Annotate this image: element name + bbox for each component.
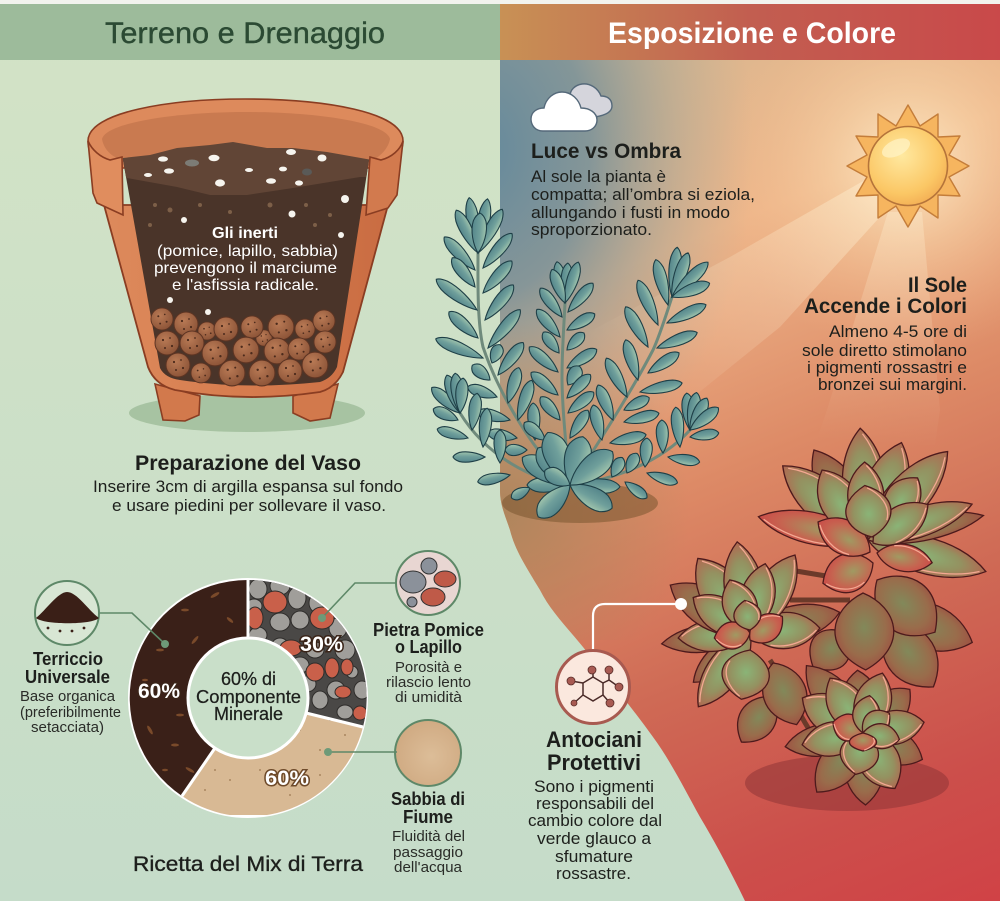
connecting stems — [770, 570, 850, 745]
text block: Preparazione del Vaso — [93, 452, 403, 515]
header: Esposizione e Colore: Esposizione e Colore — [608, 17, 896, 50]
icon: sand — [395, 720, 461, 786]
callout: Sabbia di Fiume: dell'acqua — [394, 859, 463, 876]
top page strip — [0, 0, 1000, 4]
callout: Sabbia di Fiume: passaggio — [393, 844, 463, 861]
text block: Luce vs Ombra: allungando i fusti in modo — [531, 204, 730, 222]
heading: Ricetta del Mix di Terra: Ricetta del Mix di Terra — [133, 853, 363, 876]
rosette: small — [782, 654, 929, 806]
rosette: large — [755, 427, 991, 702]
text block: Il Sole Accende i Colori — [802, 274, 967, 394]
callout: Sabbia di Fiume: Fiume — [403, 807, 453, 827]
callout: Pietra Pomice o Lapillo: Pietra Pomice — [373, 620, 484, 640]
text block: Il Sole Accende i Colori: i pigmenti rossastri e — [807, 359, 967, 377]
pot wall — [104, 205, 388, 397]
donut percentages — [138, 633, 343, 790]
plant shadow — [502, 483, 658, 523]
callout: Pietra Pomice o Lapillo: di umidità — [395, 689, 463, 706]
segment: terriccio 60% — [130, 580, 246, 796]
segment: pietra pomice 30% — [250, 580, 367, 727]
callout: Terriccio Universale: Terriccio — [33, 649, 103, 669]
text block: Preparazione del Vaso: e usare piedini per sollevare il vaso. — [112, 497, 386, 515]
clay pebbles — [151, 308, 336, 386]
text block: Luce vs Ombra: Al sole la pianta è — [531, 168, 666, 186]
text block: Luce vs Ombra: Luce vs Ombra — [531, 140, 681, 163]
panel: right exposure background — [500, 0, 1000, 901]
text block: Il Sole Accende i Colori: bronzei sui margini. — [818, 376, 967, 394]
pot rim front right — [366, 141, 403, 215]
segment: sabbia 60% — [182, 714, 363, 815]
text block: Antociani Protettivi: Protettivi — [547, 750, 641, 775]
donut centre label — [196, 669, 301, 724]
text block: Antociani Protettivi: verde glauco a — [537, 830, 652, 848]
callout: Terriccio Universale: Universale — [25, 667, 110, 687]
callout: Sabbia di Fiume — [324, 720, 465, 876]
text block: Il Sole Accende i Colori: Accende i Colori — [804, 295, 967, 318]
callout: Pietra Pomice o Lapillo: rilascio lento — [386, 674, 471, 691]
callout: Sabbia di Fiume: Sabbia di — [391, 789, 465, 809]
text block: Antociani Protettivi: cambio colore dal — [528, 812, 662, 830]
text: pot caption: e l'asfissia radicale. — [172, 277, 319, 294]
donut percentages: 60% — [138, 680, 180, 703]
basal rosette — [517, 428, 620, 524]
chart: soil mix donut — [125, 575, 370, 818]
text: pot caption: Gli inerti — [212, 225, 278, 242]
segment dividers — [182, 580, 363, 796]
icon: clouds — [531, 84, 612, 131]
text block: Antociani Protettivi: Antociani — [546, 727, 642, 752]
pot feet — [155, 384, 338, 421]
pot rim front left — [88, 141, 123, 215]
text block: Antociani Protettivi: responsabili del — [536, 795, 654, 813]
text: pot caption: (pomice, lapillo, sabbia) — [157, 243, 338, 260]
icon: sun — [847, 105, 969, 227]
pot shadow — [129, 394, 365, 432]
callout: Pietra Pomice o Lapillo: o Lapillo — [395, 637, 462, 657]
donut percentages: 30% — [300, 633, 343, 656]
text block: Antociani Protettivi: rossastre. — [556, 865, 631, 883]
rosette: medium — [660, 539, 843, 752]
callout: Sabbia di Fiume: Fluidità del — [392, 828, 465, 845]
header: Terreno e Drenaggio: Terreno e Drenaggio — [105, 17, 385, 50]
stem C leaves — [587, 247, 712, 448]
text block: Preparazione del Vaso: Preparazione del Vaso — [135, 452, 361, 475]
text block: Il Sole Accende i Colori: sole diretto stimolano — [802, 342, 967, 360]
callout: Pietra Pomice o Lapillo — [318, 551, 484, 706]
text block: Luce vs Ombra: sproporzionato. — [531, 221, 652, 239]
illustration: etiolated plant in shade — [428, 197, 722, 524]
callout: Terriccio Universale: setacciata) — [31, 719, 104, 736]
text block: Antociani Protettivi: Sono i pigmenti — [534, 778, 654, 796]
callout: Terriccio Universale: Base organica — [20, 688, 116, 705]
donut hole — [188, 638, 308, 758]
text block: Luce vs Ombra — [531, 140, 755, 239]
text block: Preparazione del Vaso: Inserire 3cm di argilla espansa sul fondo — [93, 478, 403, 496]
header: Terreno e Drenaggio — [0, 4, 500, 60]
stems — [460, 253, 690, 485]
pot rim back — [88, 99, 403, 168]
illustration: red-tinted succulent cluster — [660, 427, 991, 811]
header: Esposizione e Colore — [500, 4, 1000, 60]
soil cross-section — [123, 142, 369, 386]
illustration: terracotta pot cross-section — [88, 99, 403, 432]
succulent shadow — [745, 755, 949, 811]
callout: Pietra Pomice o Lapillo: Porosità e — [395, 659, 462, 676]
text: pot caption — [154, 225, 338, 294]
callout: Terriccio Universale — [20, 581, 169, 736]
stem D leaves — [428, 373, 532, 502]
donut centre label: Componente — [196, 687, 301, 707]
icon: soil pile — [35, 581, 99, 645]
icon: pumice stones — [396, 551, 460, 615]
stem A leaves — [433, 197, 549, 456]
stem E leaves — [607, 392, 722, 502]
text block: Antociani Protettivi — [528, 727, 662, 883]
callout line to succulent — [593, 598, 687, 650]
icon: anthocyanin molecule — [556, 650, 630, 724]
stem B leaves — [526, 260, 600, 441]
callout: Terriccio Universale: (preferibilmente — [20, 704, 121, 721]
text block: Il Sole Accende i Colori: Il Sole — [908, 274, 967, 297]
donut centre label: 60% di — [221, 669, 276, 689]
donut percentages: 60% — [265, 767, 309, 790]
text block: Il Sole Accende i Colori: Almeno 4-5 ore di — [829, 323, 967, 341]
text block: Antociani Protettivi: sfumature — [555, 848, 633, 866]
text block: Luce vs Ombra: compatta; all’ombra si eziola, — [531, 186, 755, 204]
donut centre label: Minerale — [214, 704, 283, 724]
text: pot caption: prevengono il marciume — [154, 260, 337, 277]
